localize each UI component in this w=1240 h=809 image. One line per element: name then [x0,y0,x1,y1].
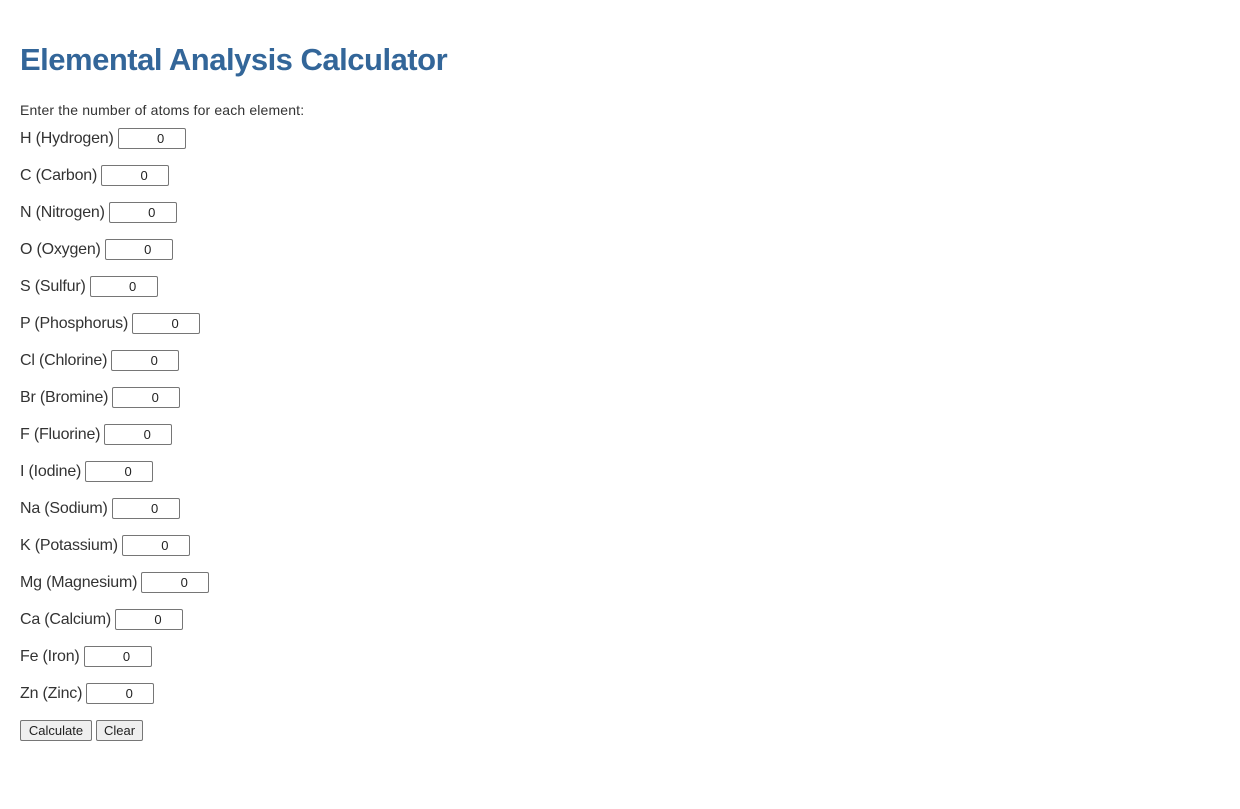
row: O: O (Oxygen) [20,240,101,258]
title: Elemental Analysis Calculator [20,42,447,77]
row: Fe: 0 [123,649,130,664]
row: N: 0 [148,205,155,220]
row: H [20,128,186,149]
row: I: 0 [125,464,132,479]
row: Fe [20,646,152,667]
row: Ca: Ca (Calcium) [20,610,111,628]
row: H: H (Hydrogen) [20,130,114,146]
row: N [20,202,177,223]
row: Ca: 0 [154,612,162,627]
row: K [20,535,190,556]
row: Mg: Mg (Magnesium) [20,574,137,590]
row: O: 0 [144,242,151,257]
row: Na: Na (Sodium) [20,500,108,516]
row: S: 0 [129,279,136,294]
row: Mg [20,572,209,593]
button: Clear [96,720,143,741]
row: S: S (Sulfur) [20,278,86,294]
row: Ca [20,609,183,630]
row: Br: 0 [152,390,159,405]
row: C: 0 [141,168,148,183]
row: Cl: 0 [151,353,158,368]
intro text: Enter the number of atoms for each element: [20,102,304,118]
row: C: C (Carbon) [20,166,97,184]
row: Cl: Cl (Chlorine) [20,352,107,368]
row: Zn [20,683,154,704]
row: P [20,313,200,334]
row: I: I (Iodine) [20,462,81,480]
row: Zn: 0 [126,686,133,701]
row: I [20,461,153,482]
button: Calculate [20,720,92,741]
row: Na [20,498,180,519]
row: O [20,239,173,260]
row: Na: 0 [151,501,158,516]
button: Clear: Clear [104,723,135,738]
row: Mg: 0 [181,575,188,590]
row: P: 0 [171,316,179,331]
button: Calculate: Calculate [29,723,83,738]
row: N: N (Nitrogen) [20,204,105,220]
row: Fe: Fe (Iron) [20,648,80,664]
row: H: 0 [157,131,164,146]
row: P: P (Phosphorus) [20,314,128,332]
row: K: 0 [161,538,168,553]
row: F [20,424,172,445]
row: Br: Br (Bromine) [20,388,108,406]
row: F: 0 [144,427,151,442]
row: Br [20,387,180,408]
row: S [20,276,158,297]
row: C [20,165,169,186]
row: Zn: Zn (Zinc) [20,684,82,702]
row: Cl [20,350,179,371]
row: F: F (Fluorine) [20,426,100,442]
row: K: K (Potassium) [20,536,118,554]
